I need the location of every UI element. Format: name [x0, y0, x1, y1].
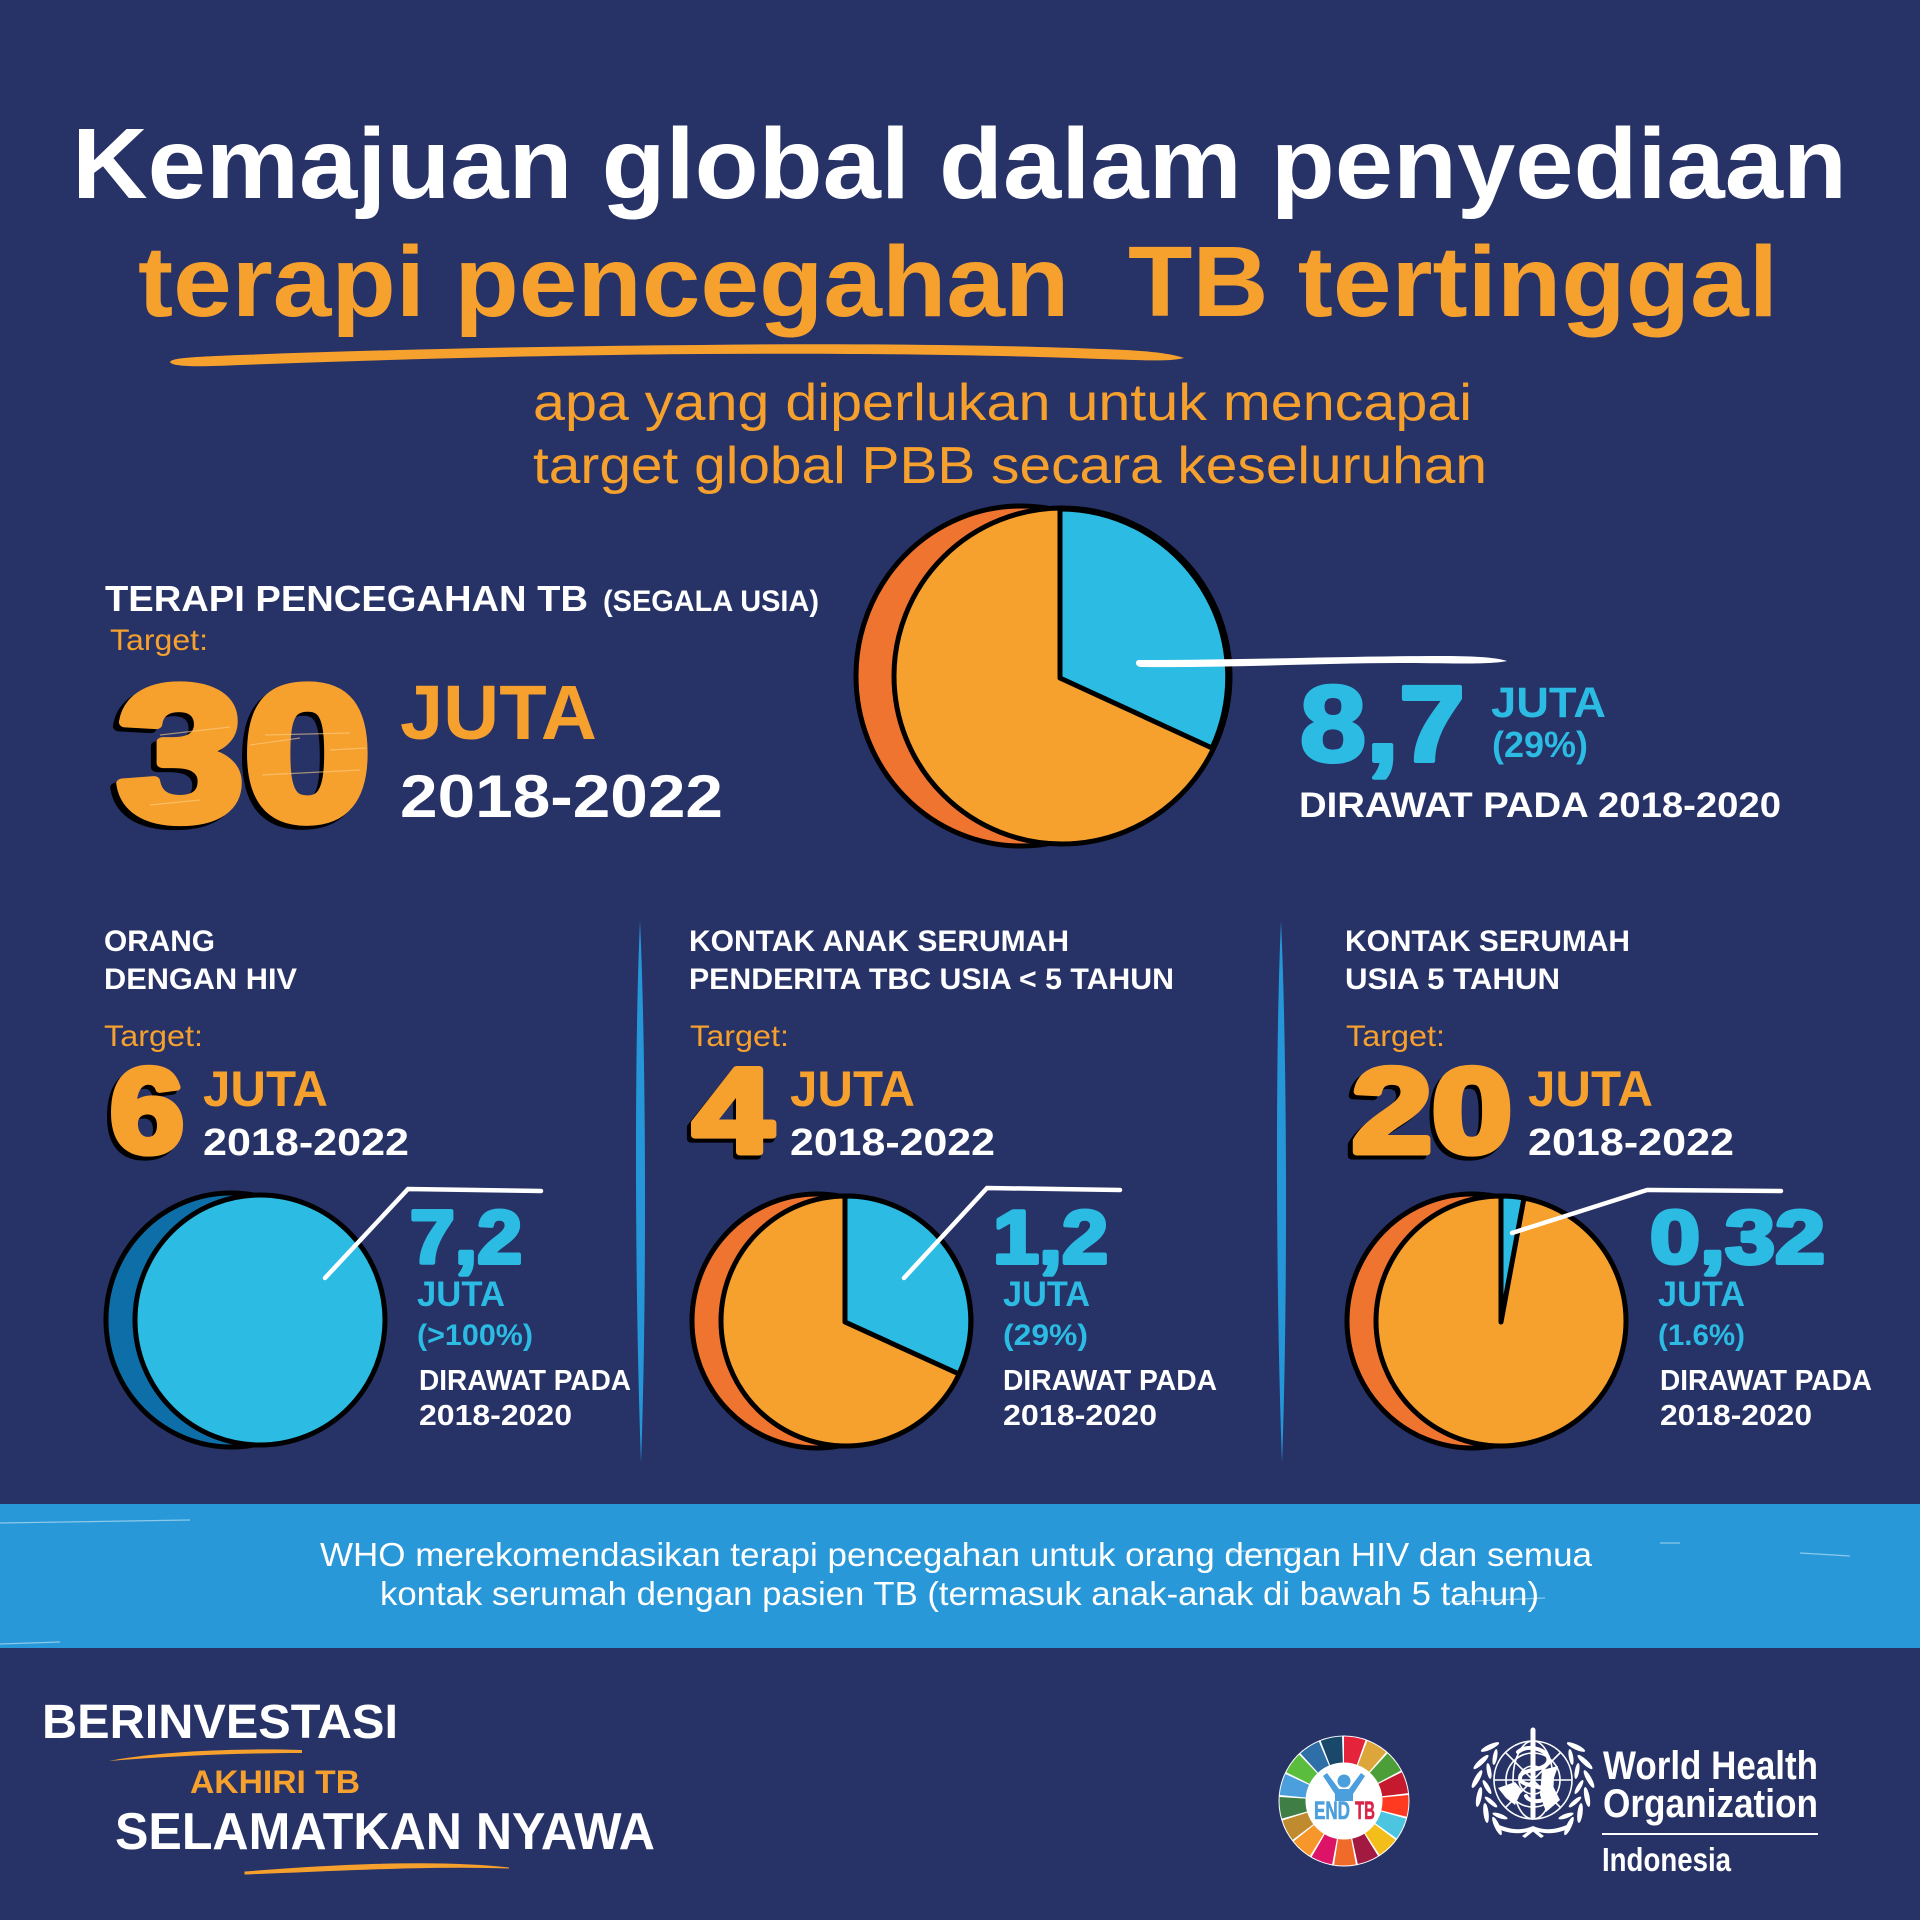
unit and period: [400, 670, 723, 830]
result: 8,7 juta: (29%): [1492, 724, 1588, 765]
End TB wordmark: END: [1314, 1797, 1350, 1825]
slogan underline: [109, 1749, 302, 1761]
result: 8,7 juta: 8,7: [1300, 663, 1465, 784]
slogan underline: [245, 1864, 509, 1874]
result: 1,2: [993, 1195, 1108, 1279]
title underline stroke: [170, 344, 1184, 366]
panel: household contacts aged 5: [1345, 925, 1872, 1448]
target label: Target:: [104, 1020, 203, 1053]
unit and period: 2018-2022: [400, 763, 723, 830]
heading: [104, 925, 297, 996]
result: (29%): [1003, 1319, 1088, 1352]
big number 30: 30: [117, 648, 371, 860]
result: 2018-2020: [1003, 1400, 1157, 1432]
result: [1650, 1195, 1872, 1432]
unit and period: JUTA: [790, 1061, 915, 1117]
result: JUTA: [1658, 1275, 1745, 1314]
laurel left: [1470, 1740, 1535, 1838]
divider: [1277, 921, 1286, 1463]
title: terapi pencegahan TB tertinggal: [138, 226, 1778, 338]
result: [410, 1195, 631, 1432]
heading: KONTAK ANAK SERUMAH: [689, 925, 1069, 958]
heading: USIA 5 TAHUN: [1345, 963, 1560, 996]
pie chart: 29%: [692, 1194, 971, 1448]
heading: KONTAK SERUMAH: [1345, 925, 1630, 958]
recommendation text: WHO merekomendasikan terapi pencegahan untuk orang dengan HIV dan semua: [320, 1536, 1593, 1573]
target label: Target:: [1346, 1020, 1445, 1053]
heading: [689, 925, 1174, 996]
recommendation text: kontak serumah dengan pasien TB (termasuk anak-anak di bawah 5 tahun): [380, 1575, 1539, 1612]
heading: DENGAN HIV: [104, 963, 297, 996]
result: 8,7 juta: [1299, 663, 1781, 825]
result: (>100%): [417, 1319, 533, 1352]
recommendation band: [0, 1504, 1920, 1648]
unit and period: 2018-2022: [203, 1122, 409, 1164]
unit and period: 2018-2022: [1528, 1122, 1734, 1164]
heading: ORANG: [104, 925, 215, 958]
unit and period: [203, 1061, 409, 1164]
figure with raised arms: [1323, 1773, 1365, 1801]
big number 20: 20: [1347, 1048, 1509, 1182]
campaign slogan: [42, 1696, 655, 1874]
big number 6: 6: [110, 1044, 184, 1178]
campaign slogan: AKHIRI TB: [190, 1764, 360, 1800]
callout line: overall: [1136, 656, 1507, 667]
result: 0,32: [1650, 1195, 1825, 1279]
unit and period: JUTA: [203, 1061, 328, 1117]
campaign slogan: BERINVESTASI: [42, 1696, 398, 1749]
result: [993, 1195, 1217, 1432]
recommendation text: [320, 1536, 1593, 1612]
unit and period: JUTA: [1528, 1061, 1653, 1117]
heading: [1345, 925, 1630, 996]
result: 7,2: [410, 1195, 522, 1279]
title: [72, 108, 1847, 338]
big number 20: 20: [1352, 1044, 1512, 1178]
big number 30: 30: [111, 652, 367, 864]
logo: World Health Organization emblem: [1470, 1730, 1596, 1838]
big number 4: 4: [689, 1048, 771, 1182]
subtitle: apa yang diperlukan untuk mencapai: [533, 374, 1472, 432]
continents: [1498, 1766, 1560, 1812]
logo: World Health Organization wordmark: [1602, 1744, 1818, 1878]
result: DIRAWAT PADA: [419, 1365, 631, 1397]
End TB wordmark: TB: [1355, 1797, 1375, 1825]
result: 2018-2020: [1660, 1400, 1812, 1432]
title: Kemajuan global dalam penyediaan: [72, 108, 1847, 220]
heading: all ages: TERAPI PENCEGAHAN TB: [105, 578, 588, 619]
logo: World Health Organization wordmark: Organization: [1603, 1782, 1818, 1826]
unit and period: JUTA: [400, 670, 597, 756]
result: DIRAWAT PADA: [1003, 1365, 1217, 1397]
result: (1.6%): [1658, 1319, 1745, 1352]
pie chart: overall 29%: [856, 506, 1230, 846]
panel: people with HIV: [104, 925, 631, 1447]
big number 4: 4: [693, 1044, 773, 1178]
result: JUTA: [1003, 1275, 1090, 1314]
panel: child household contacts under 5: [689, 925, 1217, 1448]
heading: all ages: (SEGALA USIA): [603, 585, 819, 618]
subtitle: [533, 374, 1487, 495]
pie chart: over 100%: [106, 1193, 385, 1447]
result: DIRAWAT PADA: [1660, 1365, 1872, 1397]
subtitle: target global PBB secara keseluruhan: [533, 437, 1487, 495]
big number 6: 6: [106, 1048, 180, 1182]
unit and period: [790, 1061, 995, 1164]
callout line: [1512, 1190, 1781, 1233]
target label: Target:: [110, 624, 208, 657]
result: 8,7 juta: JUTA: [1491, 679, 1606, 727]
laurel right: [1531, 1740, 1596, 1838]
unit and period: [1528, 1061, 1734, 1164]
result: JUTA: [417, 1275, 505, 1314]
result: 8,7 juta: DIRAWAT PADA 2018-2020: [1299, 786, 1781, 825]
heading: PENDERITA TBC USIA < 5 TAHUN: [689, 963, 1174, 996]
callout line: [904, 1188, 1120, 1278]
logo: World Health Organization wordmark: World Health: [1603, 1744, 1818, 1788]
divider: [636, 921, 645, 1463]
heading: all ages: [105, 578, 819, 619]
callout line: [325, 1189, 541, 1278]
campaign slogan: SELAMATKAN NYAWA: [115, 1803, 655, 1861]
globe: [1494, 1741, 1572, 1819]
logo: End TB: [1271, 1728, 1417, 1874]
logo: World Health Organization wordmark: Indonesia: [1602, 1841, 1732, 1878]
result: 2018-2020: [419, 1400, 572, 1432]
pie chart: 1.6%: [1347, 1194, 1626, 1448]
target label: Target:: [690, 1020, 789, 1053]
unit and period: 2018-2022: [790, 1122, 995, 1164]
panel: overall TB preventive therapy target: [105, 578, 819, 864]
staff and snake: [1518, 1730, 1548, 1817]
